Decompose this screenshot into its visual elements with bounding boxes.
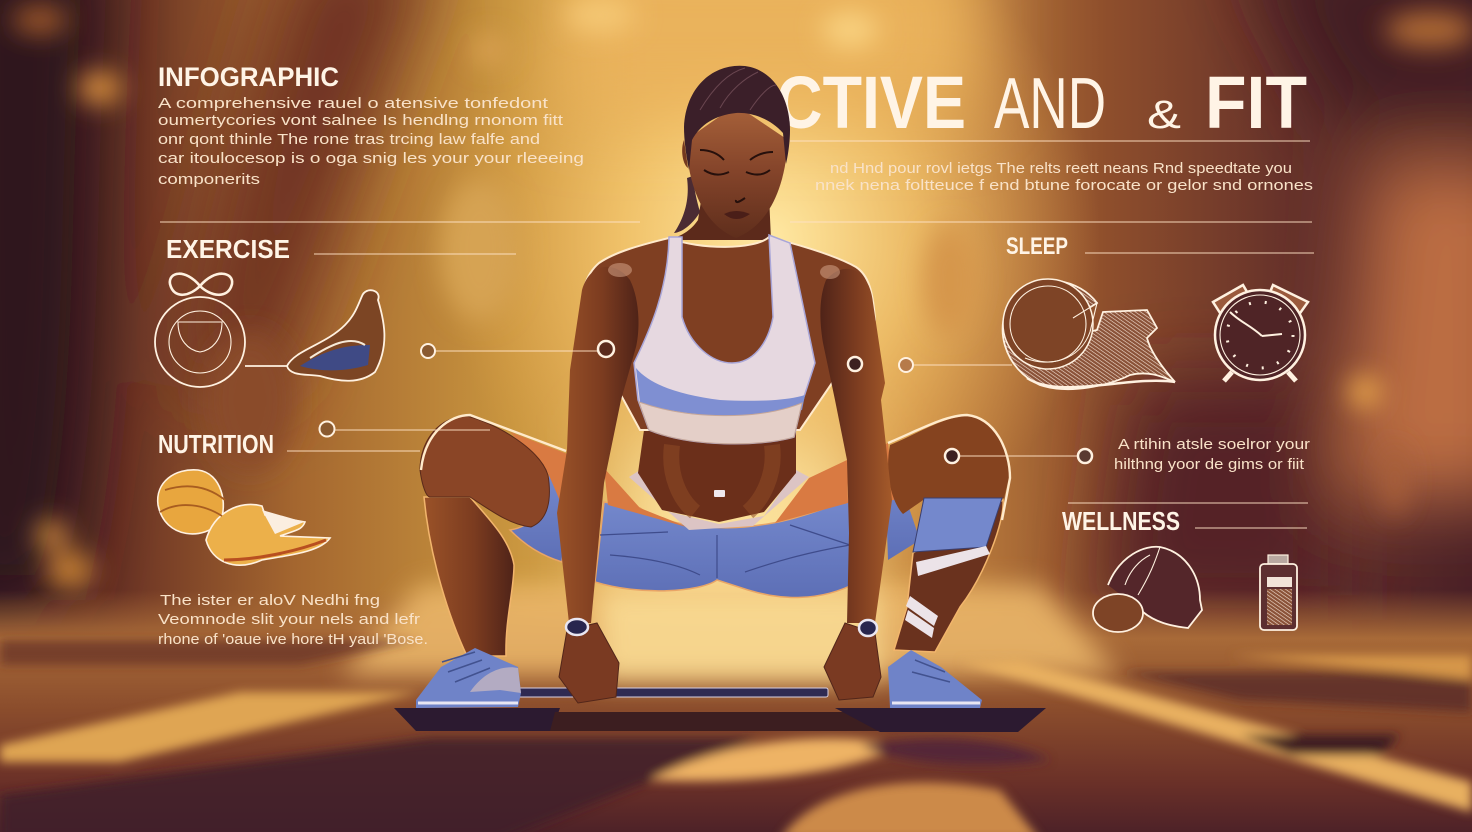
shorts xyxy=(595,500,856,597)
title side text block xyxy=(815,161,1313,194)
intro text block: car itoulocesop is o oga snig les your your rleeeing xyxy=(158,151,584,167)
figure: woman in deep squat xyxy=(394,66,1046,732)
connector: wellness xyxy=(945,449,1092,463)
shoulders and chest xyxy=(580,237,875,430)
right arm xyxy=(820,269,892,623)
icon: nutrition food xyxy=(158,470,330,565)
left shoe xyxy=(416,648,521,708)
hips and torso xyxy=(604,430,848,530)
title: ACTIVE AND & FIT: FIT xyxy=(1205,61,1307,144)
left leg xyxy=(420,415,570,656)
intro text block xyxy=(158,96,584,188)
heading: wellness: WELLNESS xyxy=(1062,506,1180,536)
watches xyxy=(566,619,877,636)
hair xyxy=(684,66,790,170)
icon: exercise medal with ribbon xyxy=(155,274,287,387)
sports top xyxy=(634,235,815,444)
nutrition text block: rhone of 'oaue ive hore tH yaul 'Bose. xyxy=(158,632,428,648)
ground: road with light streaks xyxy=(0,585,1472,832)
right text block: A rtihin atsle soelror your xyxy=(1118,437,1310,453)
left arm xyxy=(557,267,638,623)
intro subtitle: INFOGRAPHIC xyxy=(158,62,339,92)
icon: sleep pillow xyxy=(1003,279,1175,389)
title: ACTIVE AND & FIT xyxy=(776,61,1307,144)
shoulder highlights xyxy=(608,263,840,279)
connector: nutrition xyxy=(320,422,490,436)
icon: supplement bottle xyxy=(1260,555,1297,630)
heading: sleep: SLEEP xyxy=(1006,233,1068,260)
right text block: hilthng yoor de gims or fiit xyxy=(1114,457,1304,473)
icon: wellness helmet xyxy=(1093,547,1202,632)
title: ACTIVE AND & FIT: CTIVE xyxy=(776,61,966,144)
connector: sleep xyxy=(848,357,1012,372)
left hand xyxy=(559,623,619,703)
right text block xyxy=(1114,437,1310,473)
nutrition text block: The ister er aloV Nedhi fng xyxy=(160,593,380,609)
nutrition text block: Veomnode slit your nels and lefr xyxy=(158,612,420,628)
connector: exercise xyxy=(421,341,614,358)
nutrition text block xyxy=(158,593,428,648)
icon: running shoe xyxy=(287,290,384,381)
title side text block: nnek nena foltteuce f end btune forocate or gelor snd ornones xyxy=(815,178,1313,194)
heading: nutrition: NUTRITION xyxy=(158,429,274,459)
head xyxy=(686,105,788,238)
title side text block: nd Hnd pour rovl ietgs The relts reett neans Rnd speedtate you xyxy=(830,161,1292,177)
title: ACTIVE AND & FIT: AND xyxy=(994,64,1106,144)
icon: alarm clock xyxy=(1213,285,1308,381)
lips xyxy=(724,211,750,219)
intro text block: componerits xyxy=(158,172,260,188)
title: ACTIVE AND & FIT: & xyxy=(1147,93,1181,137)
hair strands xyxy=(700,68,776,110)
ponytail xyxy=(674,176,700,233)
intro text block: oumertycories vont salnee Is hendlng rnonom fitt xyxy=(158,113,563,129)
right leg xyxy=(845,415,1010,652)
right shoe xyxy=(888,650,982,708)
heading: exercise: EXERCISE xyxy=(166,234,290,264)
balance board xyxy=(394,688,1046,732)
neck xyxy=(669,195,771,240)
closed eyes and brows xyxy=(700,150,773,202)
intro text block: onr qont thinle The rone tras trcing law falfe and xyxy=(158,132,540,148)
right hand xyxy=(824,623,881,700)
intro text block: A comprehensive rauel o atensive tonfedont xyxy=(158,96,548,112)
ear xyxy=(682,140,688,168)
